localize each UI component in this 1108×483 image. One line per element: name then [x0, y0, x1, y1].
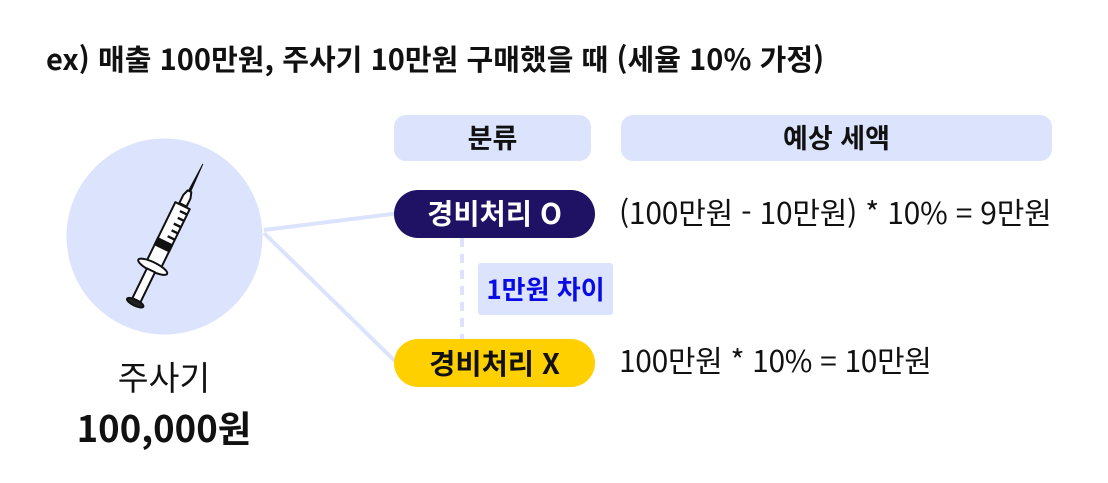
- formula: not expensed: 100만원 * 10% = 10만원: [619, 337, 932, 381]
- header: category: 분류: [468, 116, 517, 156]
- callout: difference: [478, 263, 613, 315]
- pill: not expensed: [394, 339, 595, 387]
- product circle: [66, 138, 262, 334]
- title: ex) 매출 100만원, 주사기 10만원 구매했을 때 (세율 10% 가정): [46, 37, 824, 79]
- header: category: [394, 115, 591, 161]
- pill: expensed: 경비처리 O: [427, 192, 562, 233]
- product name: 주사기: [118, 351, 210, 400]
- callout: difference: 1만원 차이: [486, 270, 605, 306]
- pill: not expensed: 경비처리 X: [429, 342, 560, 383]
- product price: 100,000원: [77, 400, 251, 453]
- connector: to expensed: [264, 213, 400, 230]
- formula: expensed: (100만원 - 10만원) * 10% = 9만원: [619, 189, 1052, 233]
- header: expected tax: [621, 115, 1052, 161]
- pill: expensed: [394, 190, 595, 238]
- header: expected tax: 예상 세액: [783, 116, 890, 156]
- connector: to not expensed: [264, 233, 400, 366]
- icon: syringe: [119, 157, 217, 312]
- connector: dashed difference: [460, 238, 464, 340]
